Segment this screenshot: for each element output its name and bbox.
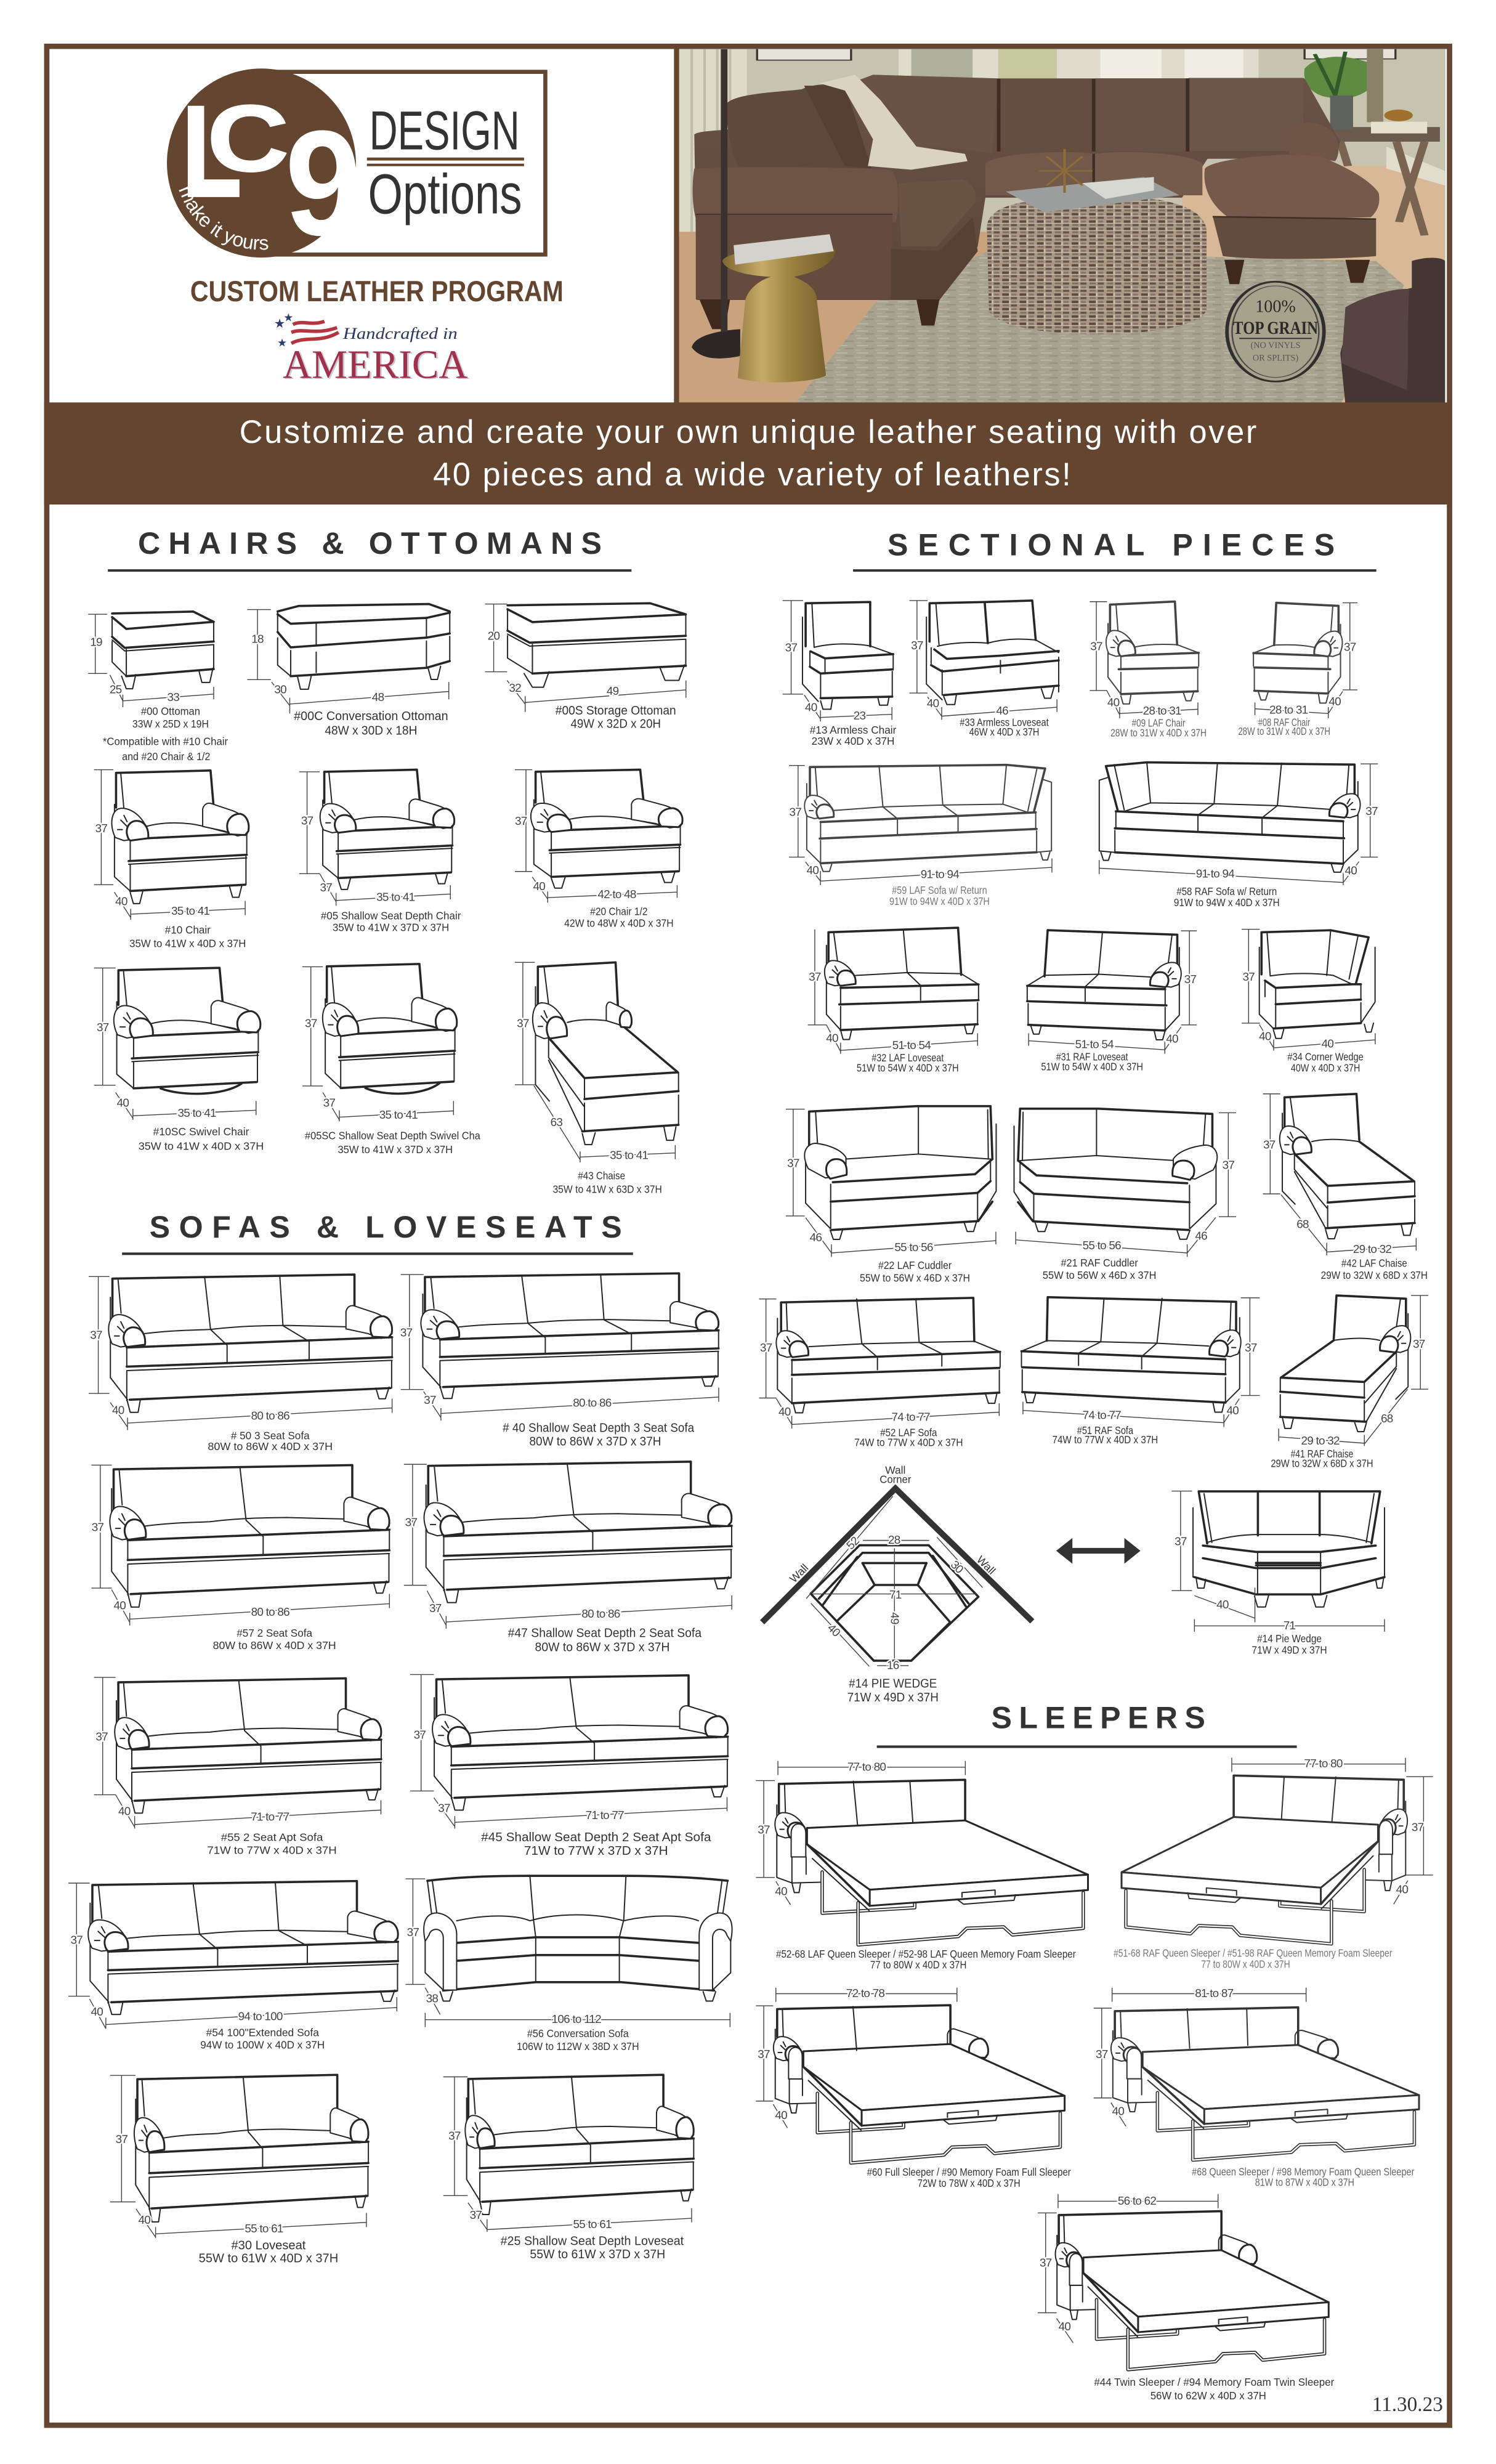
#58 RAF Sofa with Return: #58 RAF Sofa w/ Return [1176,885,1277,898]
#32 LAF Loveseat: 51 to 54 [892,1039,931,1052]
#51-68 RAF Queen Sleeper: 77 to 80W x 40D x 37H [1201,1958,1290,1970]
#00C Conversation Ottoman: 48W x 30D x 18H [325,723,417,737]
#14 Pie Wedge floor plan: Corner [879,1473,911,1485]
#14 Pie Wedge front view: 71 [1284,1619,1296,1632]
#13 Armless Chair: 40 [805,702,817,715]
#30 Loveseat: #30 Loveseat [231,2238,306,2252]
logo circle with LC9 mark: L [183,79,241,222]
#58 RAF Sofa with Return: 37 [1365,805,1378,818]
#68 Queen Sleeper: 37 [1096,2048,1108,2061]
#57 2 Seat Sofa: 80W to 86W x 40D x 37H [213,1639,336,1651]
#14 Pie Wedge floor plan: 40 [825,1622,843,1639]
#05 Shallow Seat Depth Chair: 35W to 41W x 37D x 37H [333,922,449,934]
#56 Conversation Sofa: 106W to 112W x 38D x 37H [517,2040,639,2053]
#47 Shallow Seat Depth 2 Seat Sofa: 80W to 86W x 37D x 37H [535,1640,669,1654]
#43 Chaise: 37 [517,1017,529,1030]
stamp: 100% top grain: 100% [1255,297,1296,316]
#60 Full Sleeper: 72W to 78W x 40D x 37H [918,2177,1021,2189]
#22 LAF Cuddler [786,1106,996,1284]
#14 Pie Wedge floor plan: 49 [887,1612,900,1624]
stamp: 100% top grain [1233,297,1318,363]
heading: sectional pieces: SECTIONAL PIECES [887,528,1335,562]
#13 Armless Chair: 23 [854,710,866,723]
panel: sleepers [756,1701,1433,2402]
#05SC Shallow Seat Depth Swivel Chair: #05SC Shallow Seat Depth Swivel Cha [305,1130,480,1142]
#47 Shallow Seat Depth 2 Seat Sofa: 37 [429,1602,442,1615]
#51-68 RAF Queen Sleeper: #51-68 RAF Queen Sleeper / #51-98 RAF Queen Memory Foam Sleeper [1114,1947,1393,1959]
#32 LAF Loveseat: 40 [826,1032,838,1045]
#47 Shallow Seat Depth 2 Seat Sofa [404,1462,732,1654]
panel: tagline band [44,402,1452,505]
panel: chairs and ottomans [88,526,686,1195]
#10SC Swivel Chair: 40 [117,1097,129,1110]
#52-68 LAF Queen Sleeper: 77 to 80 [847,1761,886,1773]
#42 LAF Chaise: 29W to 32W x 68D x 37H [1321,1269,1428,1281]
#08 RAF Chair: 28W to 31W x 40D x 37H [1238,725,1330,737]
#32 LAF Loveseat: 37 [809,971,821,984]
#31 RAF Loveseat: 51 to 54 [1075,1038,1114,1051]
#50 3 Seat Sofa: 80 to 86 [251,1410,289,1423]
#42 LAF Chaise [1263,1094,1428,1281]
#55 2 Seat Apt Sofa: 37 [95,1731,108,1744]
#05SC Shallow Seat Depth Swivel Chair [302,964,480,1156]
#32 LAF Loveseat: #32 LAF Loveseat [871,1052,944,1064]
#00S Storage Ottoman: 32 [509,682,521,695]
#08 RAF Chair: 40 [1328,695,1341,708]
handcrafted in america badge: AMERICA [283,342,467,387]
#41 RAF Chaise: 29 to 32 [1301,1435,1340,1448]
#30 Loveseat [110,2075,368,2265]
#57 2 Seat Sofa [91,1465,389,1651]
#20 Chair 1/2: #20 Chair 1/2 [590,905,648,917]
#43 Chaise [515,962,679,1195]
#51 RAF Sofa: 37 [1245,1342,1257,1355]
stamp: 100% top grain: OR SPLITS) [1253,354,1298,363]
#68 Queen Sleeper [1094,1987,1419,2188]
#51-68 RAF Queen Sleeper: 77 to 80 [1304,1757,1343,1770]
handcrafted in america badge: ★ [274,317,285,331]
#43 Chaise: #43 Chaise [578,1170,625,1182]
#05 Shallow Seat Depth Chair [299,769,461,934]
#40 Shallow Seat Depth 3 Seat Sofa [400,1273,719,1449]
panel: tagline band: 40 pieces and a wide variety of leathers! [433,457,1071,493]
#10 Chair: 35W to 41W x 40D x 37H [129,938,246,950]
#54 100 inch Extended Sofa: 40 [91,2006,103,2019]
#09 LAF Chair: 28 to 31 [1143,705,1181,718]
#21 RAF Cuddler: 55 to 56 [1083,1239,1121,1252]
#40 Shallow Seat Depth 3 Seat Sofa: 37 [400,1326,413,1339]
#44 Twin Sleeper: 37 [1040,2257,1052,2270]
date stamp: 11.30.23 [1372,2393,1443,2416]
#43 Chaise: 35 to 41 [610,1149,649,1162]
logo circle with LC9 mark: 9 [285,100,362,267]
stamp: 100% top grain: (NO VINYLS [1250,341,1301,351]
#34 Corner Wedge: 40 [1322,1038,1333,1051]
logo wordmark [367,100,524,226]
panel: room photo illustration [671,47,1468,407]
#33 Armless Loveseat [910,601,1059,738]
#60 Full Sleeper: 40 [775,2109,787,2122]
#00C Conversation Ottoman [247,604,450,737]
#44 Twin Sleeper: 56 to 62 [1118,2195,1156,2208]
#21 RAF Cuddler: #21 RAF Cuddler [1061,1257,1138,1269]
#31 RAF Loveseat: 51W to 54W x 40D x 37H [1041,1061,1143,1073]
#56 Conversation Sofa [405,1876,732,2053]
#14 Pie Wedge front view: 37 [1175,1536,1187,1549]
#31 RAF Loveseat [1027,930,1197,1073]
#14 Pie Wedge front view: 40 [1216,1599,1229,1611]
#59 LAF Sofa with Return: #59 LAF Sofa w/ Return [892,884,987,896]
#47 Shallow Seat Depth 2 Seat Sofa: #47 Shallow Seat Depth 2 Seat Sofa [508,1626,702,1640]
#44 Twin Sleeper: 40 [1059,2320,1070,2333]
#00S Storage Ottoman: 49W x 32D x 20H [570,717,661,731]
#10 Chair: 37 [95,822,107,835]
#68 Queen Sleeper: #68 Queen Sleeper / #98 Memory Foam Queen Sleeper [1192,2165,1414,2178]
#33 Armless Loveseat: 37 [911,639,923,652]
#10SC Swivel Chair: 35 to 41 [178,1107,216,1120]
heading: sleepers: SLEEPERS [992,1701,1205,1735]
logo wordmark: DESIGN [370,100,520,161]
#14 Pie Wedge floor plan: 28 [888,1534,900,1547]
#58 RAF Sofa with Return: 91W to 94W x 40D x 37H [1174,896,1280,909]
#00 Ottoman: *Compatible with #10 Chair [103,736,228,748]
#57 2 Seat Sofa: 37 [92,1521,104,1534]
#59 LAF Sofa with Return [789,765,1052,907]
#21 RAF Cuddler [1014,1109,1236,1281]
#44 Twin Sleeper [1038,2194,1334,2402]
stamp: 100% top grain: TOP GRAIN [1233,318,1318,338]
#41 RAF Chaise: 29W to 32W x 68D x 37H [1271,1457,1373,1470]
#32 LAF Loveseat [808,928,979,1074]
#33 Armless Loveseat: 46W x 40D x 37H [969,726,1039,738]
#20 Chair 1/2 [515,769,682,929]
#52-68 LAF Queen Sleeper: #52-68 LAF Queen Sleeper / #52-98 LAF Queen Memory Foam Sleeper [776,1948,1076,1960]
#56 Conversation Sofa: 37 [407,1926,419,1939]
#10SC Swivel Chair: 37 [97,1021,109,1034]
#45 Shallow Seat Depth 2 Seat Apt Sofa: 37 [414,1728,426,1741]
#52 LAF Sofa: 40 [778,1406,791,1419]
#00 Ottoman: 33 [168,691,179,704]
#25 Shallow Seat Depth Loveseat [443,2075,693,2261]
#51 RAF Sofa: 74W to 77W x 40D x 37H [1052,1433,1158,1446]
#57 2 Seat Sofa: 40 [114,1599,126,1612]
#00 Ottoman: 25 [110,683,122,696]
#10 Chair: 40 [115,895,127,908]
#31 RAF Loveseat: 40 [1166,1032,1178,1045]
#58 RAF Sofa with Return [1099,763,1378,909]
#13 Armless Chair: 23W x 40D x 37H [812,735,894,747]
#08 RAF Chair: 37 [1344,641,1356,654]
#42 LAF Chaise: 29 to 32 [1353,1243,1391,1256]
#34 Corner Wedge: #34 Corner Wedge [1287,1051,1364,1063]
#20 Chair 1/2: 42 to 48 [597,888,636,901]
#10SC Swivel Chair: #10SC Swivel Chair [153,1125,249,1138]
#51 RAF Sofa [1021,1297,1259,1446]
#05 Shallow Seat Depth Chair: 37 [301,815,313,828]
#30 Loveseat: 37 [116,2133,127,2146]
#52 LAF Sofa: #52 LAF Sofa [880,1427,937,1439]
#32 LAF Loveseat: 51W to 54W x 40D x 37H [857,1061,959,1074]
#33 Armless Loveseat: 46 [996,705,1008,718]
#00 Ottoman: 19 [90,636,102,649]
#47 Shallow Seat Depth 2 Seat Sofa: 37 [405,1517,417,1530]
#14 Pie Wedge front view: 71W x 49D x 37H [1251,1643,1327,1656]
#40 Shallow Seat Depth 3 Seat Sofa: # 40 Shallow Seat Depth 3 Seat Sofa [503,1420,695,1435]
#21 RAF Cuddler: 55W to 56W x 46D x 37H [1043,1269,1156,1281]
#22 LAF Cuddler: #22 LAF Cuddler [878,1259,952,1271]
#56 Conversation Sofa: 106 to 112 [552,2013,601,2026]
#14 Pie Wedge floor plan [762,1464,1032,1704]
#47 Shallow Seat Depth 2 Seat Sofa: 80 to 86 [581,1608,620,1621]
#10 Chair [94,770,249,950]
#25 Shallow Seat Depth Loveseat: 37 [448,2130,461,2142]
#34 Corner Wedge: 40 [1259,1030,1271,1043]
#52-68 LAF Queen Sleeper: 40 [775,1885,787,1898]
#05SC Shallow Seat Depth Swivel Chair: 37 [305,1017,317,1030]
#30 Loveseat: 55W to 61W x 40D x 37H [199,2251,338,2265]
#13 Armless Chair: 37 [785,641,798,654]
#10SC Swivel Chair [94,968,264,1152]
logo wordmark: Options [368,163,522,226]
#05 Shallow Seat Depth Chair: #05 Shallow Seat Depth Chair [321,909,461,922]
#54 100 inch Extended Sofa: 94 to 100 [238,2011,283,2024]
#30 Loveseat: 40 [138,2214,150,2227]
#41 RAF Chaise: #41 RAF Chaise [1291,1448,1353,1460]
#08 RAF Chair: #08 RAF Chair [1258,716,1310,728]
#00S Storage Ottoman: 20 [488,630,500,643]
#14 Pie Wedge floor plan: 30 [948,1558,966,1576]
#33 Armless Loveseat: #33 Armless Loveseat [960,716,1049,728]
#14 Pie Wedge floor plan: 52 [844,1534,862,1552]
#55 2 Seat Apt Sofa: 71W to 77W x 40D x 37H [207,1844,337,1857]
#00C Conversation Ottoman: 48 [372,691,384,704]
#51-68 RAF Queen Sleeper: 40 [1396,1884,1408,1897]
#45 Shallow Seat Depth 2 Seat Apt Sofa: #45 Shallow Seat Depth 2 Seat Apt Sofa [481,1830,711,1844]
#14 Pie Wedge floor plan: 16 [887,1659,899,1672]
#09 LAF Chair: 37 [1090,641,1102,654]
#45 Shallow Seat Depth 2 Seat Apt Sofa: 37 [438,1802,450,1815]
#05SC Shallow Seat Depth Swivel Chair: 37 [323,1097,335,1110]
#59 LAF Sofa with Return: 37 [789,806,801,819]
#51 RAF Sofa: 40 [1226,1404,1239,1417]
#59 LAF Sofa with Return: 91W to 94W x 40D x 37H [889,895,990,907]
#22 LAF Cuddler: 55 to 56 [894,1241,933,1254]
#60 Full Sleeper [756,1987,1071,2189]
#41 RAF Chaise: 68 [1381,1412,1393,1425]
#50 3 Seat Sofa: # 50 3 Seat Sofa [231,1429,310,1441]
#34 Corner Wedge: 37 [1243,971,1255,984]
#00S Storage Ottoman: #00S Storage Ottoman [556,703,676,718]
#14 Pie Wedge floor plan: Wall [885,1464,905,1477]
#13 Armless Chair: #13 Armless Chair [810,724,896,736]
#00S Storage Ottoman [485,603,686,731]
#54 100 inch Extended Sofa: #54 100"Extended Sofa [206,2026,319,2038]
#13 Armless Chair [783,601,896,747]
#05 Shallow Seat Depth Chair: 37 [320,881,332,894]
#55 2 Seat Apt Sofa: #55 2 Seat Apt Sofa [221,1831,323,1844]
#40 Shallow Seat Depth 3 Seat Sofa: 80W to 86W x 37D x 37H [529,1435,661,1449]
#51-68 RAF Queen Sleeper [1114,1757,1433,1970]
#51 RAF Sofa: #51 RAF Sofa [1077,1424,1133,1437]
handcrafted in america badge: ★ [277,337,287,349]
#08 RAF Chair: 28 to 31 [1269,704,1308,717]
#34 Corner Wedge [1242,930,1375,1074]
#25 Shallow Seat Depth Loveseat: 37 [470,2209,482,2222]
#14 Pie Wedge floor plan: 71 [889,1589,902,1602]
#50 3 Seat Sofa [89,1275,392,1453]
#54 100 inch Extended Sofa [68,1881,398,2051]
#22 LAF Cuddler: 46 [810,1231,822,1244]
#43 Chaise: 35W to 41W x 63D x 37H [552,1183,662,1195]
#00C Conversation Ottoman: #00C Conversation Ottoman [294,709,448,723]
#00 Ottoman: 33W x 25D x 19H [132,718,209,730]
#52 LAF Sofa: 74 to 77 [892,1411,930,1424]
heading: chairs and ottomans: CHAIRS & OTTOMANS [138,526,602,561]
#22 LAF Cuddler: 37 [787,1157,799,1170]
#34 Corner Wedge: 40W x 40D x 37H [1291,1061,1360,1074]
#00C Conversation Ottoman: 18 [251,633,264,646]
#14 Pie Wedge floor plan: 71W x 49D x 37H [847,1690,939,1704]
#52 LAF Sofa: 74W to 77W x 40D x 37H [854,1436,963,1448]
#05SC Shallow Seat Depth Swivel Chair: 35W to 41W x 37D x 37H [338,1143,453,1156]
#68 Queen Sleeper: 81 to 87 [1195,1987,1234,2000]
#52-68 LAF Queen Sleeper [756,1761,1088,1971]
panel: logo header [167,68,564,388]
#57 2 Seat Sofa: #57 2 Seat Sofa [237,1627,312,1639]
#22 LAF Cuddler: 55W to 56W x 46D x 37H [860,1271,970,1284]
#60 Full Sleeper: #60 Full Sleeper / #90 Memory Foam Full Sleeper [867,2166,1071,2178]
#56 Conversation Sofa: 38 [426,1993,438,2006]
#42 LAF Chaise: #42 LAF Chaise [1341,1257,1407,1270]
#52 LAF Sofa: 37 [760,1342,772,1355]
#52 LAF Sofa [759,1298,1000,1448]
#44 Twin Sleeper: #44 Twin Sleeper / #94 Memory Foam Twin Sleeper [1094,2376,1334,2388]
heading: sofas and loveseats: SOFAS & LOVESEATS [150,1210,622,1244]
#45 Shallow Seat Depth 2 Seat Apt Sofa [410,1674,728,1858]
#09 LAF Chair: #09 LAF Chair [1132,717,1186,729]
#10SC Swivel Chair: 35W to 41W x 40D x 37H [139,1140,264,1152]
#33 Armless Loveseat: 40 [927,697,939,710]
panel: tagline band: Customize and create your own unique leather seating with over [240,415,1256,450]
#45 Shallow Seat Depth 2 Seat Apt Sofa: 71 to 77 [586,1809,624,1822]
#50 3 Seat Sofa: 80W to 86W x 40D x 37H [208,1440,333,1453]
#60 Full Sleeper: 37 [758,2048,770,2061]
#51 RAF Sofa: 74 to 77 [1083,1409,1121,1422]
#45 Shallow Seat Depth 2 Seat Apt Sofa: 71W to 77W x 37D x 37H [524,1844,668,1858]
#10 Chair: 35 to 41 [171,905,209,918]
#20 Chair 1/2: 42W to 48W x 40D x 37H [564,917,674,929]
#58 RAF Sofa with Return: 40 [1345,864,1357,877]
#55 2 Seat Apt Sofa: 40 [118,1805,131,1818]
logo circle with LC9 mark: C [207,86,289,191]
#41 RAF Chaise: 37 [1413,1338,1425,1351]
handcrafted in america badge [274,312,469,388]
#59 LAF Sofa with Return: 40 [807,864,819,877]
#08 RAF Chair [1238,603,1357,737]
#09 LAF Chair: 28W to 31W x 40D x 37H [1110,726,1207,739]
#55 2 Seat Apt Sofa [94,1677,381,1857]
#09 LAF Chair [1090,601,1207,739]
#00C Conversation Ottoman: 30 [274,683,286,696]
#30 Loveseat: 55 to 61 [245,2223,283,2235]
program title: CUSTOM LEATHER PROGRAM [190,275,564,307]
#57 2 Seat Sofa: 80 to 86 [251,1606,289,1619]
#59 LAF Sofa with Return: 91 to 94 [921,869,959,881]
#52-68 LAF Queen Sleeper: 77 to 80W x 40D x 37H [870,1959,966,1971]
handcrafted in america badge: Handcrafted in [342,324,458,342]
#25 Shallow Seat Depth Loveseat: 55W to 61W x 37D x 37H [530,2247,665,2261]
#14 Pie Wedge front view: #14 Pie Wedge [1257,1632,1322,1645]
#14 Pie Wedge floor plan: Wall [787,1562,811,1585]
#00 Ottoman: #00 Ottoman [141,705,200,717]
#58 RAF Sofa with Return: 91 to 94 [1196,868,1234,881]
#20 Chair 1/2: 37 [515,815,527,828]
handcrafted in america badge: ★ [283,312,293,324]
#14 Pie Wedge front view [1171,1491,1385,1656]
logo circle with LC9 mark [167,68,548,267]
#10 Chair: #10 Chair [165,923,211,936]
handcrafted in america badge: AMERICA [285,343,469,388]
#43 Chaise: 63 [551,1116,562,1129]
#14 Pie Wedge floor plan: #14 PIE WEDGE [849,1677,937,1691]
#42 LAF Chaise: 68 [1296,1218,1309,1231]
#00 Ottoman [88,612,228,763]
#00 Ottoman: and #20 Chair & 1/2 [122,750,210,763]
#14 Pie Wedge floor plan: Wall [974,1554,998,1577]
#42 LAF Chaise: 37 [1263,1138,1276,1151]
#68 Queen Sleeper: 40 [1112,2105,1124,2118]
#31 RAF Loveseat: 37 [1184,973,1196,986]
#51-68 RAF Queen Sleeper: 37 [1412,1822,1424,1834]
logo circle with LC9 mark: make it yours [179,186,269,250]
#54 100 inch Extended Sofa: 94W to 100W x 40D x 37H [200,2039,325,2051]
#50 3 Seat Sofa: 40 [112,1404,124,1417]
#05 Shallow Seat Depth Chair: 35 to 41 [376,891,415,904]
#09 LAF Chair: 40 [1107,697,1120,710]
#54 100 inch Extended Sofa: 37 [71,1934,83,1947]
#21 RAF Cuddler: 46 [1195,1230,1207,1243]
#20 Chair 1/2: 40 [533,880,545,893]
arrow: double headed [1056,1538,1141,1563]
#44 Twin Sleeper: 56W to 62W x 40D x 37H [1150,2389,1266,2402]
#25 Shallow Seat Depth Loveseat: 55 to 61 [573,2218,612,2231]
#05SC Shallow Seat Depth Swivel Chair: 35 to 41 [379,1109,418,1122]
#52-68 LAF Queen Sleeper: 37 [758,1824,770,1837]
#60 Full Sleeper: 72 to 78 [846,1987,884,2000]
#50 3 Seat Sofa: 37 [90,1329,102,1342]
#41 RAF Chaise [1271,1295,1428,1470]
#40 Shallow Seat Depth 3 Seat Sofa: 37 [424,1394,436,1407]
#21 RAF Cuddler: 37 [1223,1159,1234,1172]
panel: sectional pieces [759,528,1428,1704]
#56 Conversation Sofa: #56 Conversation Sofa [527,2027,629,2040]
#31 RAF Loveseat: #31 RAF Loveseat [1056,1051,1128,1063]
#40 Shallow Seat Depth 3 Seat Sofa: 80 to 86 [573,1397,612,1410]
#00S Storage Ottoman: 49 [607,685,619,698]
#68 Queen Sleeper: 81W to 87W x 40D x 37H [1255,2176,1354,2188]
panel: sofas and loveseats [68,1210,732,2265]
#55 2 Seat Apt Sofa: 71 to 77 [251,1811,289,1824]
#25 Shallow Seat Depth Loveseat: #25 Shallow Seat Depth Loveseat [501,2234,684,2248]
divider between logo and photo [674,46,679,405]
